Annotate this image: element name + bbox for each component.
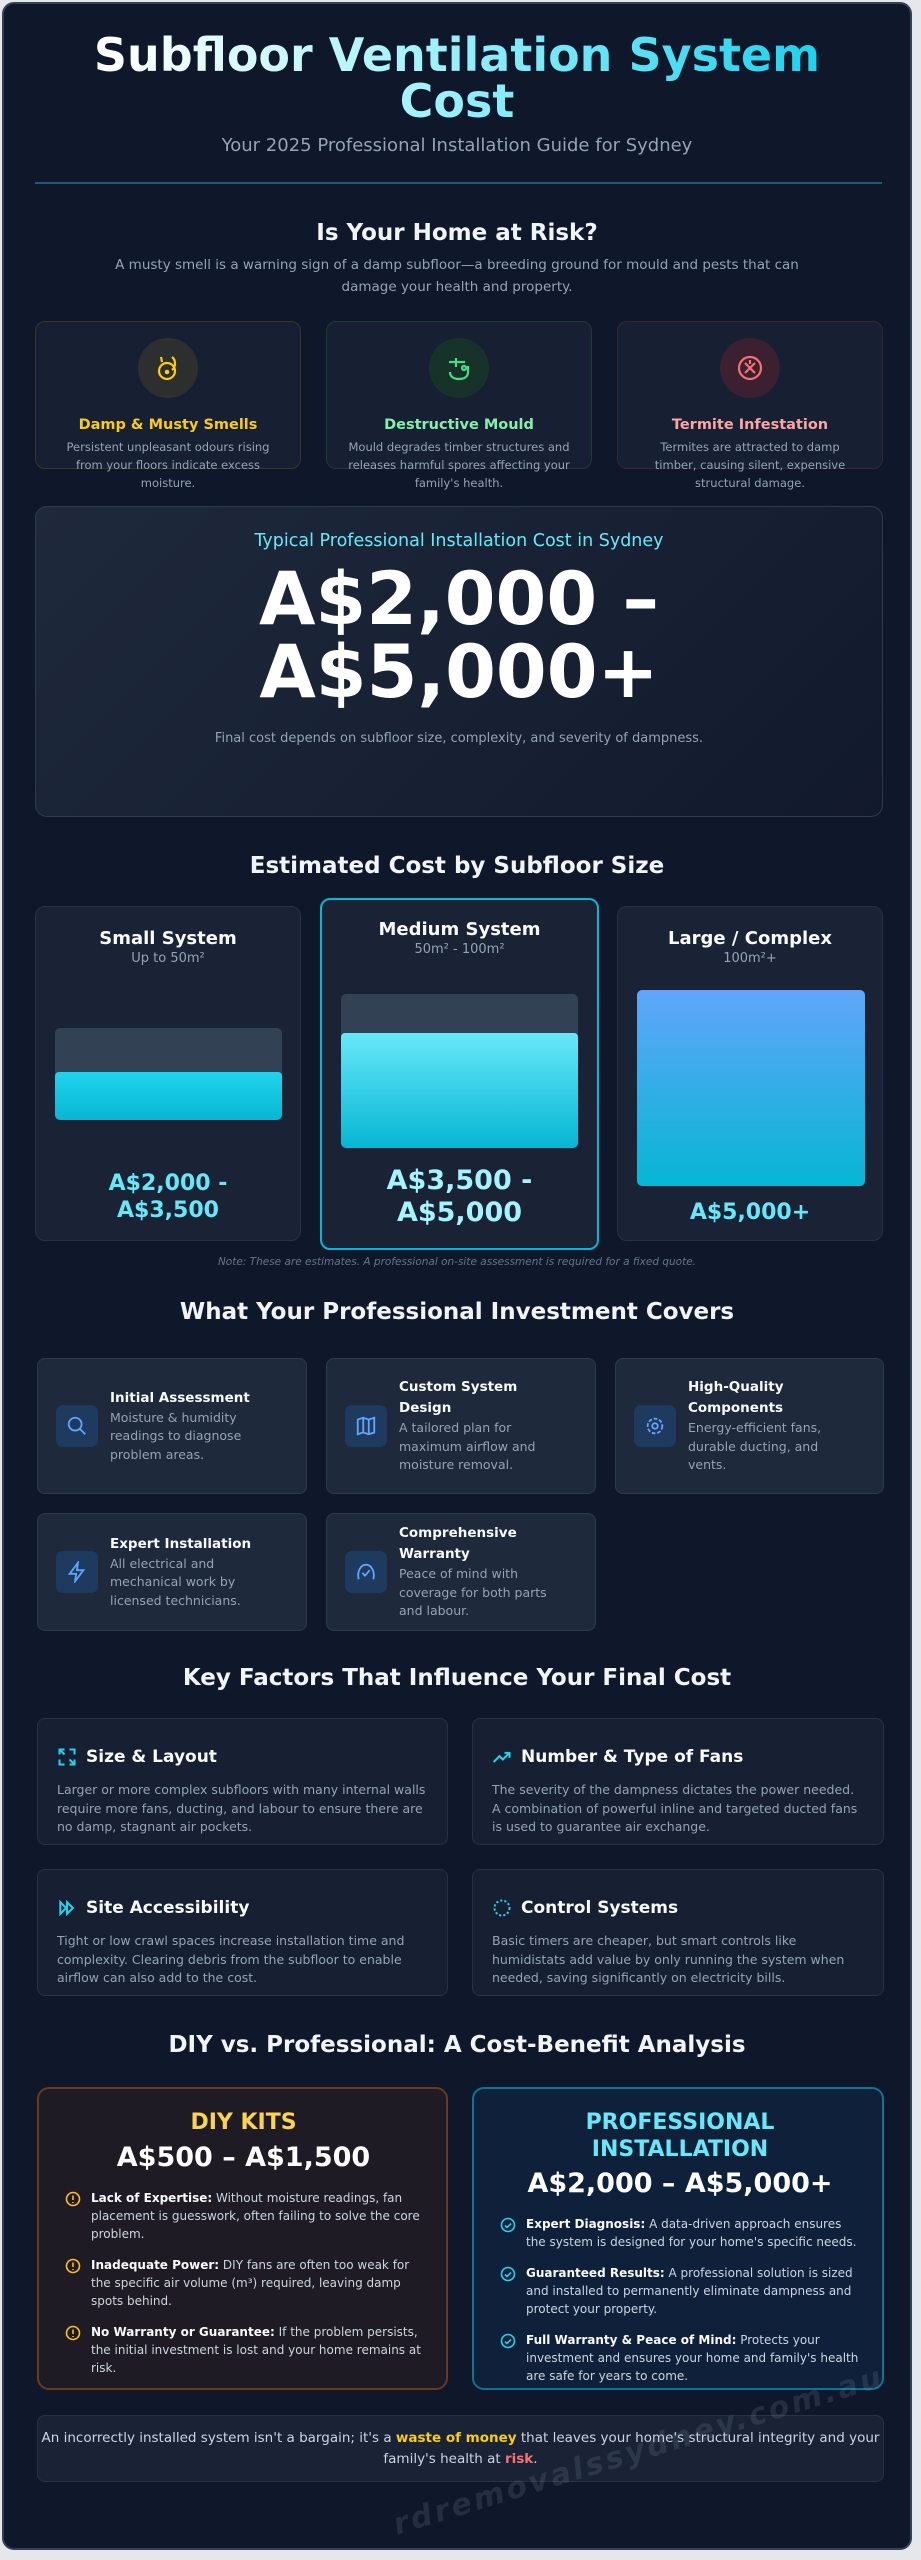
- panel: large system: 100m²+: [723, 951, 777, 966]
- big cost: A$5,000+: [259, 630, 659, 715]
- panel: typical cost: [35, 506, 883, 817]
- panel: mould: [326, 321, 592, 469]
- service: installation: Expert Installation: [110, 1536, 251, 1552]
- bar: large: [637, 990, 865, 1186]
- panel: large system: Large / Complex: [668, 928, 832, 949]
- heading: diy vs pro: DIY vs. Professional: A Cost-Benefit Analysis: [168, 2032, 746, 2058]
- service: warranty: Peace of mind with coverage for both parts and labour.: [399, 1566, 547, 1618]
- panel: large system: [617, 906, 883, 1241]
- watermark: rdremovalssydney.com.au: [389, 2359, 889, 2542]
- service: components: High-Quality Components: [688, 1379, 784, 1416]
- icon: mould: [429, 338, 489, 398]
- heading: covers: What Your Professional Investment Covers: [180, 1299, 734, 1325]
- factor: access: [37, 1869, 448, 1996]
- callout: conclusion: [37, 2415, 884, 2482]
- service: design: [326, 1358, 596, 1494]
- panel: small system: A$3,500: [117, 1198, 219, 1223]
- panel: professional: Full Warranty & Peace of Mind: Protects your investment and ensures your home and family's health are safe for years to come.: [526, 2333, 858, 2383]
- panel: medium system: A$5,000: [397, 1197, 522, 1228]
- panel: professional: Expert Diagnosis: A data-driven approach ensures the system is designed for your home's specific needs.: [526, 2217, 856, 2249]
- heading: factors: Key Factors That Influence Your Final Cost: [183, 1665, 731, 1691]
- panel: small system: A$2,000 -: [109, 1171, 227, 1196]
- panel: professional: PROFESSIONAL: [586, 2110, 774, 2135]
- panel: small system: Up to 50m²: [131, 951, 205, 966]
- icon: damp: [138, 338, 198, 398]
- service: components: Energy-efficient fans, durable ducting, and vents.: [688, 1420, 821, 1472]
- factor: control: Control Systems: [521, 1898, 678, 1918]
- panel: professional: INSTALLATION: [592, 2137, 768, 2162]
- cost note: Final cost depends on subfloor size, complexity, and severity of dampness.: [215, 731, 703, 746]
- title: Cost: [400, 74, 514, 128]
- factor: control: Basic timers are cheaper, but smart controls like humidistats add value by only running the system when needed, saving significantly on electricity bills.: [492, 1933, 844, 1985]
- panel: mould: Destructive Mould: [384, 417, 534, 433]
- panel: diy: A$500 – A$1,500: [117, 2142, 370, 2173]
- service: assessment: [37, 1358, 307, 1494]
- bar: small: [55, 1028, 282, 1120]
- panel: professional: Guaranteed Results: A professional solution is sized and installed to permanently eliminate dampness and protect your property.: [526, 2266, 853, 2316]
- factor: size: Size & Layout: [86, 1747, 217, 1767]
- service: design: A tailored plan for maximum airflow and moisture removal.: [399, 1420, 535, 1472]
- panel: diy: DIY KITS: [190, 2110, 297, 2135]
- panel: small system: [35, 906, 301, 1241]
- panel: termite: [617, 321, 883, 469]
- factor: access: Site Accessibility: [86, 1898, 249, 1918]
- panel: damp: Damp & Musty Smells: [79, 417, 257, 433]
- panel: termite: Termites are attracted to damp timber, causing silent, expensive structural damage.: [655, 440, 845, 490]
- panel: small system: Small System: [99, 928, 237, 949]
- big cost: [259, 557, 659, 715]
- service: warranty: [326, 1513, 596, 1631]
- title: [4, 32, 910, 124]
- factor: access: Tight or low crawl spaces increase installation time and complexity. Clearing debris from the subfloor to enable airflow can also add to the cost.: [57, 1933, 404, 1985]
- panel: termite: Termite Infestation: [672, 417, 828, 433]
- service: warranty: Comprehensive Warranty: [399, 1525, 517, 1562]
- service: components: [615, 1358, 884, 1494]
- panel: diy: Inadequate Power: DIY fans are often too weak for the specific air volume (m³) required, leaving damp spots behind.: [91, 2258, 409, 2308]
- service: design: Custom System Design: [399, 1379, 517, 1416]
- heading: risk: Is Your Home at Risk?: [316, 220, 598, 246]
- factor: size: Larger or more complex subfloors with many internal walls require more fans, ducting, and labour to ensure there are no damp, stagnant air pockets.: [57, 1782, 425, 1834]
- panel: damp: [35, 321, 301, 469]
- heading: size: Estimated Cost by Subfloor Size: [250, 853, 664, 879]
- panel: diy: No Warranty or Guarantee: If the problem persists, the initial investment is lost and your home remains at risk.: [91, 2325, 421, 2375]
- panel: professional: [472, 2087, 884, 2390]
- factor: size: [37, 1718, 448, 1845]
- panel: professional: A$2,000 – A$5,000+: [527, 2168, 833, 2199]
- subtitle: Your 2025 Professional Installation Guide for Sydney: [222, 135, 692, 156]
- service: assessment: Moisture & humidity readings to diagnose problem areas.: [110, 1410, 241, 1462]
- cost heading: Typical Professional Installation Cost in Sydney: [254, 531, 664, 551]
- big cost: A$2,000 –: [259, 557, 659, 642]
- icon: termite: [720, 338, 780, 398]
- panel: mould: Mould degrades timber structures and releases harmful spores affecting your family's health.: [348, 440, 570, 490]
- bar: medium: [341, 994, 578, 1148]
- title: Subfloor Ventilation System: [94, 28, 820, 82]
- estimate note: Note: These are estimates. A professional on-site assessment is required for a fixed quote.: [218, 1256, 696, 1268]
- panel: large system: A$5,000+: [690, 1200, 810, 1225]
- service: installation: [37, 1513, 307, 1631]
- factor: fans: [472, 1718, 884, 1845]
- panel: medium system: 50m² - 100m²: [414, 942, 505, 957]
- panel: medium system: Medium System: [378, 919, 540, 940]
- factor: fans: The severity of the dampness dictates the power needed. A combination of powerful inline and targeted ducted fans is used to guarantee air exchange.: [492, 1782, 857, 1834]
- callout: conclusion: An incorrectly installed system isn't a bargain; it's a waste of money that leaves your home's structural integrity and your family's health at risk.: [42, 2430, 879, 2467]
- panel: damp: Persistent unpleasant odours rising from your floors indicate excess moisture.: [67, 440, 269, 490]
- factor: control: [472, 1869, 884, 1996]
- service: assessment: Initial Assessment: [110, 1390, 250, 1406]
- risk intro text: A musty smell is a warning sign of a damp subfloor—a breeding ground for mould and pests that can damage your health and property.: [115, 257, 799, 295]
- service: installation: All electrical and mechanical work by licensed technicians.: [110, 1556, 241, 1608]
- panel: diy: Lack of Expertise: Without moisture readings, fan placement is guesswork, often failing to solve the core problem.: [91, 2191, 420, 2241]
- panel: medium system: A$3,500 -: [387, 1165, 532, 1196]
- panel: diy: [37, 2087, 448, 2390]
- panel: medium system: [320, 898, 599, 1250]
- factor: fans: Number & Type of Fans: [521, 1747, 743, 1767]
